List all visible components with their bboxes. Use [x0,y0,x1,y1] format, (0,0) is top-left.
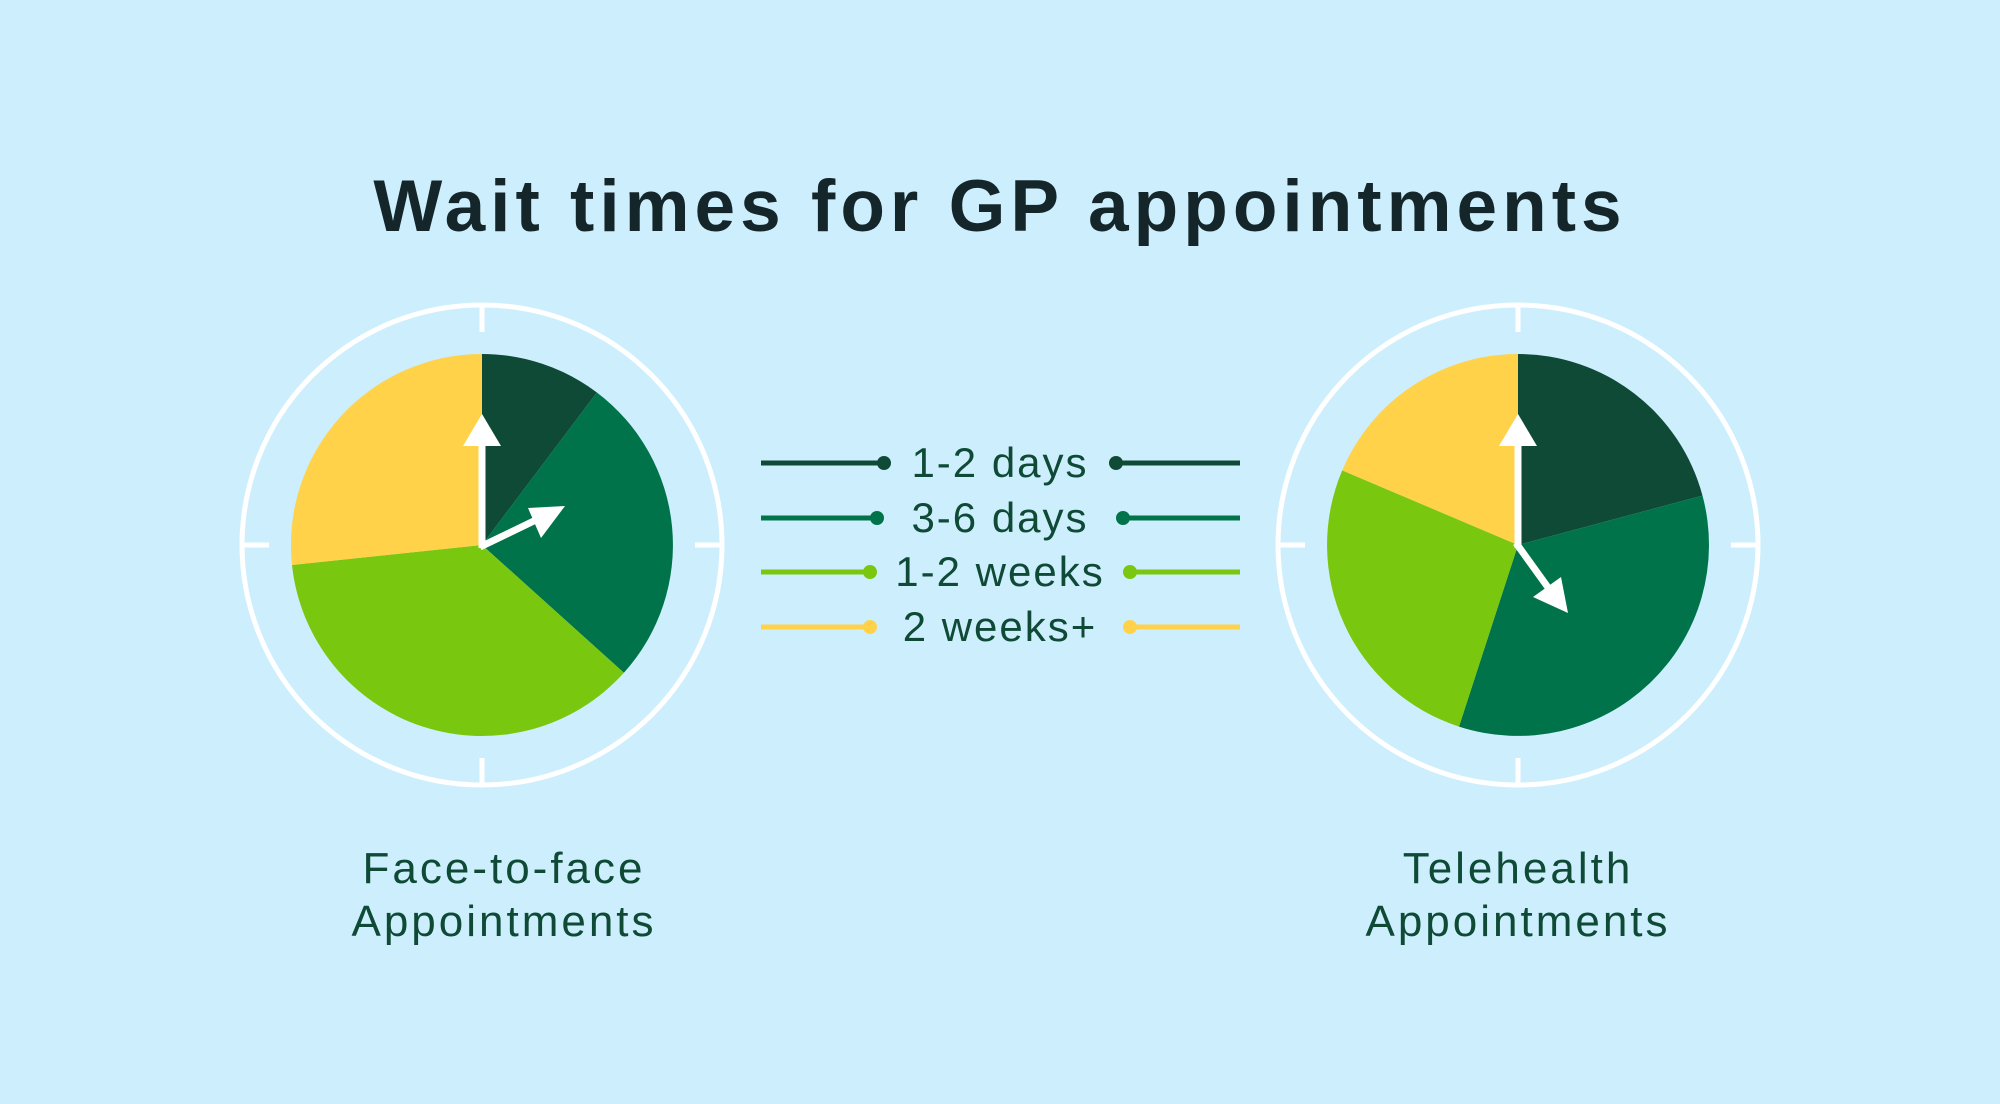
legend item: 1-2 weeks [761,548,1240,595]
legend item: 2 weeks+ [761,603,1240,650]
label: telehealth: Telehealth [1403,844,1633,893]
title: Wait times for GP appointments [373,166,1627,247]
legend item: 1-2 weeks: 1-2 weeks [895,548,1105,595]
legend item: 1-2 days [761,439,1240,486]
clock ring [242,305,722,785]
clock hands [1499,414,1568,613]
legend item: 3-6 days: 3-6 days [911,494,1089,541]
legend [761,439,1240,650]
legend item: 2 weeks+: 2 weeks+ [903,603,1097,650]
clock: face-to-face [242,305,722,785]
pie chart: face-to-face [291,354,673,736]
clock: telehealth [1278,305,1758,785]
pie chart: telehealth [1327,354,1709,736]
label: face-to-face: Appointments [351,897,657,946]
label: face-to-face: Face-to-face [363,844,645,893]
legend item: 1-2 days: 1-2 days [911,439,1089,486]
legend item: 3-6 days [761,494,1240,541]
label: telehealth: Appointments [1365,897,1671,946]
clock hands [463,414,565,548]
clock ring [1278,305,1758,785]
